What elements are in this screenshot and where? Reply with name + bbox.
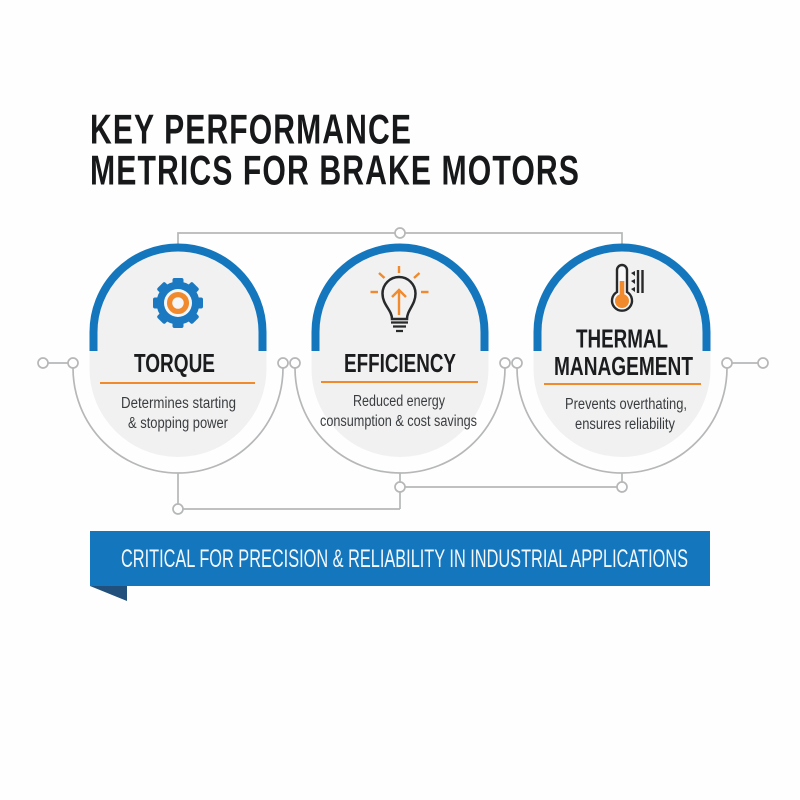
efficiency divider xyxy=(321,381,478,383)
efficiency outer arc xyxy=(290,358,510,473)
panel: torque xyxy=(38,244,288,473)
thermal description: Prevents overthating, xyxy=(565,396,687,413)
panel: efficiency xyxy=(290,244,510,473)
thermal outer arc xyxy=(512,358,768,473)
connector: bottom lines xyxy=(173,473,627,514)
efficiency card background xyxy=(312,244,488,457)
panel: thermal management xyxy=(512,244,768,473)
thermal divider xyxy=(544,383,701,385)
thermal heading: MANAGEMENT xyxy=(554,351,693,381)
torque card background xyxy=(90,244,266,457)
torque description: & stopping power xyxy=(128,415,228,432)
torque outer arc xyxy=(38,358,288,473)
torque description: Determines starting xyxy=(121,395,236,412)
thermal blue arc xyxy=(538,248,706,351)
icon: gear xyxy=(153,278,203,328)
thermal heading: THERMAL xyxy=(576,324,668,354)
efficiency blue arc xyxy=(316,248,484,351)
efficiency heading: EFFICIENCY xyxy=(344,348,456,378)
banner xyxy=(90,531,710,601)
thermal card background xyxy=(534,244,710,457)
thermal description xyxy=(565,396,687,433)
efficiency description: Reduced energy xyxy=(353,393,445,410)
connector: top line xyxy=(178,228,622,245)
title: METRICS FOR BRAKE MOTORS xyxy=(90,146,580,194)
icon: thermometer xyxy=(612,265,642,311)
title: KEY PERFORMANCE xyxy=(90,106,412,152)
banner bar xyxy=(90,531,710,586)
torque divider xyxy=(100,382,255,384)
torque heading: TORQUE xyxy=(134,348,215,378)
thermal description: ensures reliability xyxy=(575,416,675,433)
thermal heading xyxy=(554,324,693,381)
icon: light bulb xyxy=(370,266,428,331)
efficiency description: consumption & cost savings xyxy=(320,413,477,430)
torque blue arc xyxy=(94,248,262,351)
banner fold xyxy=(90,586,127,601)
torque description xyxy=(121,395,236,432)
title xyxy=(90,106,580,194)
efficiency description xyxy=(320,393,477,430)
